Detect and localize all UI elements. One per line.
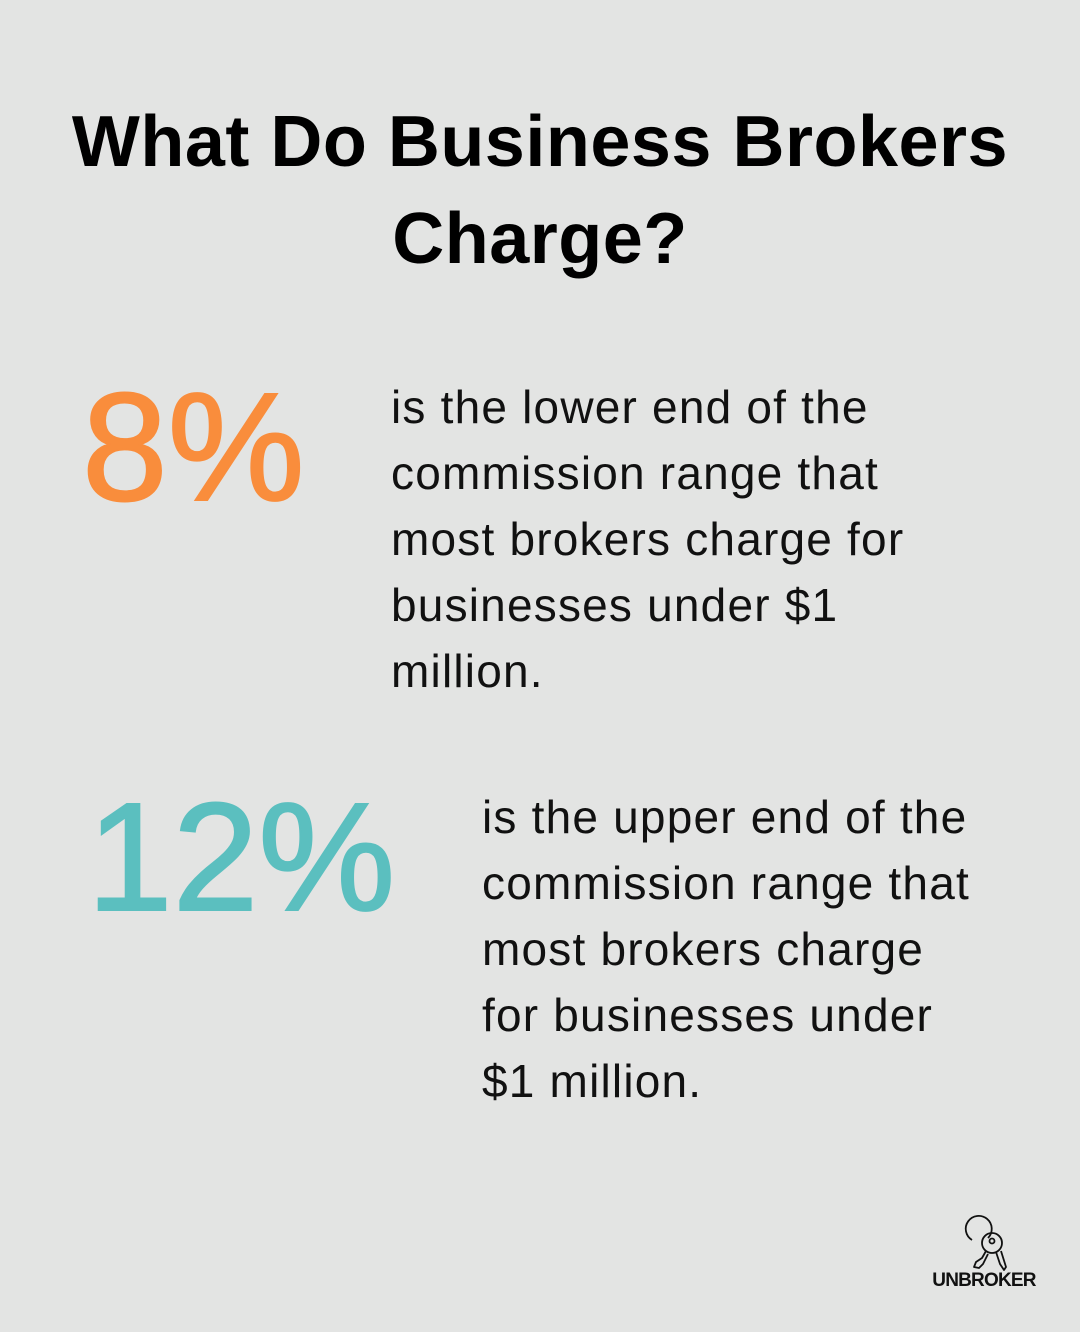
description 1: million. bbox=[391, 645, 544, 697]
brand name: UNBROKER bbox=[932, 1270, 1036, 1291]
number 12%: 12% bbox=[87, 771, 395, 943]
description 2: is the upper end of the bbox=[482, 791, 967, 843]
stat: 8% bbox=[82, 361, 904, 697]
description 2: $1 million. bbox=[482, 1055, 702, 1107]
stat: 12% bbox=[87, 771, 970, 1107]
description 1: is the lower end of the bbox=[391, 381, 869, 433]
description 2 bbox=[482, 791, 970, 1107]
number 8%: 8% bbox=[82, 361, 305, 533]
description 1: commission range that bbox=[391, 447, 879, 499]
description 1: businesses under $1 bbox=[391, 579, 838, 631]
title bbox=[72, 102, 1008, 279]
title: What Do Business Brokers bbox=[72, 102, 1008, 182]
icon: keys bbox=[964, 1215, 1007, 1271]
description 2: commission range that bbox=[482, 857, 970, 909]
description 2: most brokers charge bbox=[482, 923, 924, 975]
description 1 bbox=[391, 381, 904, 697]
description 1: most brokers charge for bbox=[391, 513, 904, 565]
logo bbox=[932, 1215, 1036, 1291]
description 2: for businesses under bbox=[482, 989, 933, 1041]
title: Charge? bbox=[392, 199, 688, 279]
